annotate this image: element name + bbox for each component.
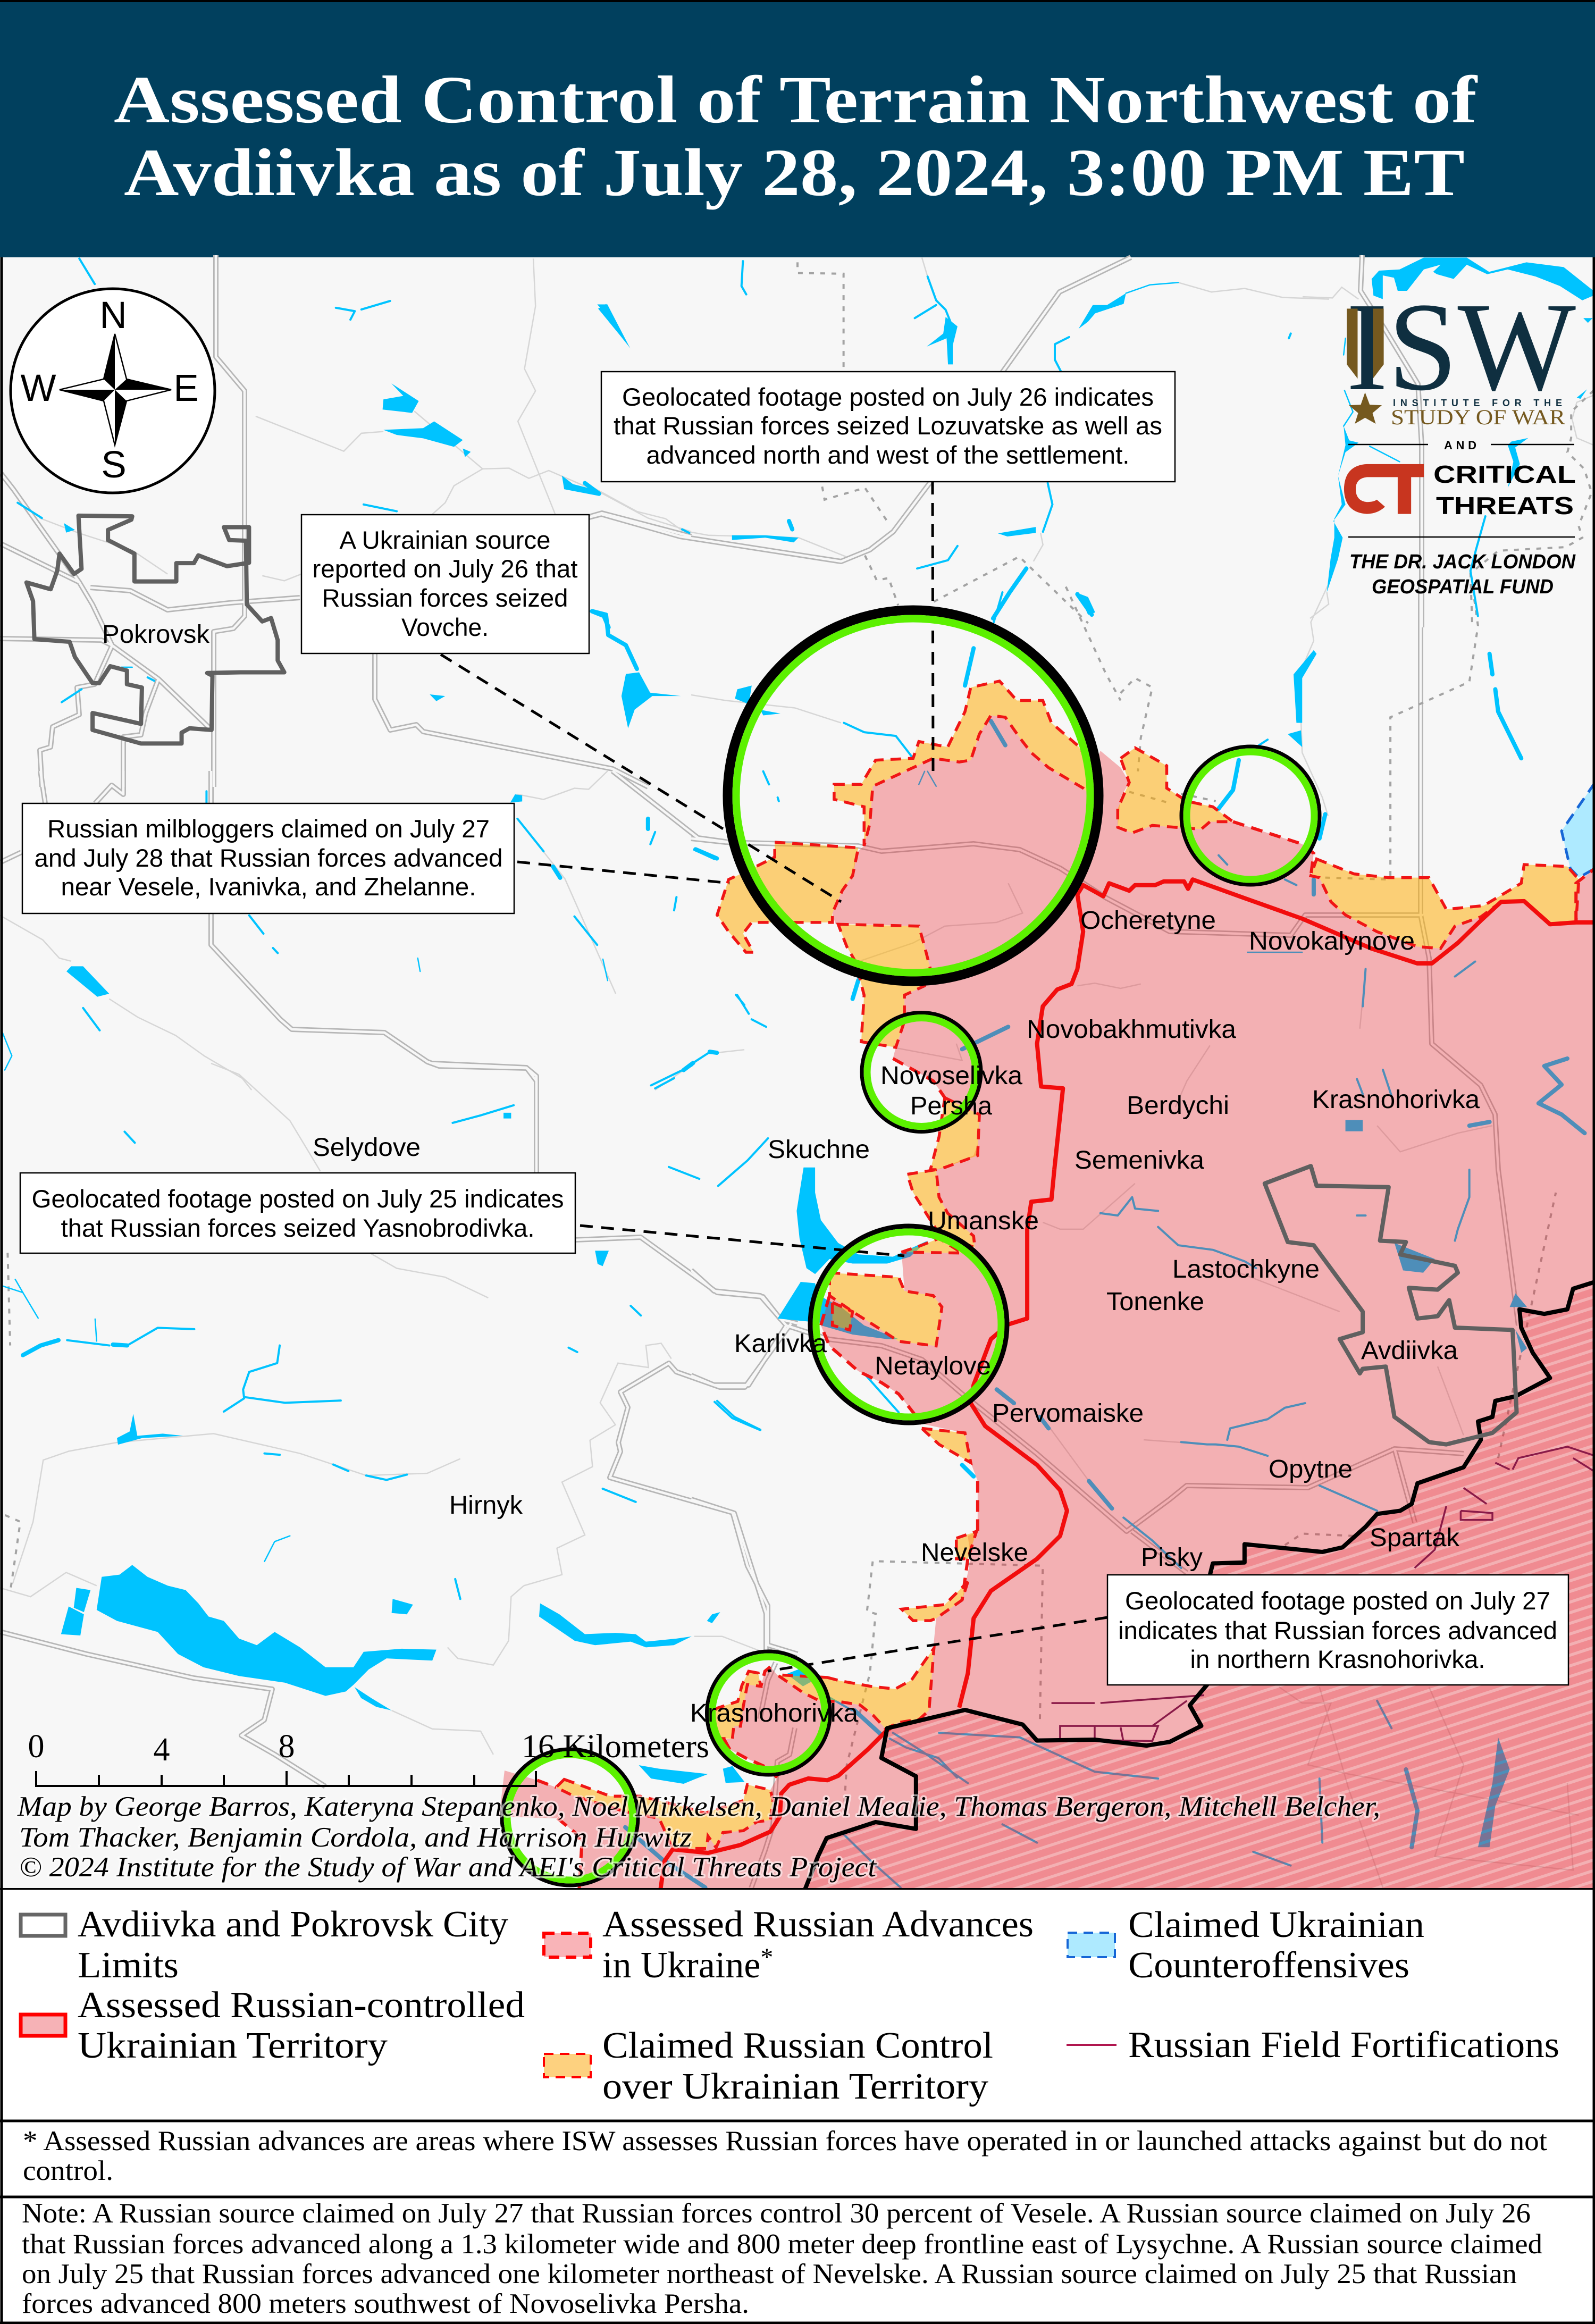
compass rose: W — [20, 367, 56, 409]
settlement labels: Hirnyk — [449, 1491, 523, 1520]
settlement labels: Pisky — [1141, 1543, 1203, 1572]
callout: Vovche: A Ukrainian source — [339, 526, 551, 554]
footnote panel — [0, 2121, 1595, 2197]
ISW wordmark: STUDY OF WAR — [1391, 405, 1565, 429]
legend: field fortifications: Russian Field Fortifications — [1128, 2025, 1559, 2066]
scale bar: 8 — [279, 1729, 295, 1765]
settlement labels: Spartak — [1370, 1524, 1460, 1552]
geospatial fund — [1349, 551, 1576, 598]
scale bar — [28, 1729, 709, 1786]
pre-invasion line of contact — [803, 1282, 1595, 1893]
note panel: that Russian forces advanced along a 1.3 kilometer wide and 800 meter deep frontline east of Lysychne. A Russian source claimed — [22, 2229, 1542, 2260]
callout: northern Krasnohorivka: indicates that Russian forces advanced — [1118, 1616, 1557, 1645]
settlement labels: Krasnohorivka — [690, 1699, 858, 1727]
settlement labels: Lastochkyne — [1172, 1255, 1320, 1283]
settlement labels: Nevelske — [921, 1539, 1028, 1567]
settlement labels: Umanske — [928, 1207, 1039, 1235]
circle: northern Krasnohorivka — [707, 1651, 830, 1775]
advance boundary dashes — [537, 821, 1595, 1889]
Avdiivka city limits — [1265, 1166, 1517, 1445]
geospatial fund: GEOSPATIAL FUND — [1372, 576, 1554, 598]
callout: Lozuvatske: advanced north and west of the settlement. — [647, 441, 1129, 469]
callout: Vesele, Ivanivka, Zhelanne: near Vesele, Ivanivka, and Zhelanne. — [61, 872, 476, 901]
geospatial fund: THE DR. JACK LONDON — [1349, 551, 1576, 573]
circle: Nevelske southwest — [502, 1749, 638, 1885]
settlement labels: Selydove — [313, 1134, 421, 1162]
legend panel — [0, 1888, 1595, 2121]
legend: city limits: Avdiivka and Pokrovsk City — [78, 1904, 508, 1945]
Pokrovsk city limits — [27, 516, 284, 743]
Critical Threats mark: THREATS — [1436, 492, 1574, 519]
callout: Yasnobrodivka: Geolocated footage posted on July 25 indicates — [32, 1185, 564, 1213]
circle: Yasnobrodivka — [810, 1226, 1007, 1423]
settlement labels: Avdiivka — [1361, 1337, 1458, 1365]
scale bar: 4 — [153, 1732, 170, 1768]
callout: Lozuvatske: that Russian forces seized Lozuvatske as well as — [614, 412, 1162, 440]
scale bar: 16 Kilometers — [522, 1729, 709, 1765]
map panel — [0, 255, 1595, 1893]
legend: Russian-controlled territory — [21, 1985, 525, 2066]
compass rose — [11, 289, 215, 493]
title: Avdiivka as of July 28, 2024, 3:00 PM ET — [124, 136, 1465, 210]
legend: claimed Ukrainian counteroffensives: Claimed Ukrainian — [1128, 1904, 1424, 1945]
claimed Russian control areas — [556, 681, 1579, 1849]
title: Assessed Control of Terrain Northwest of — [114, 63, 1478, 137]
callout: Vesele, Ivanivka, Zhelanne: and July 28 that Russian forces advanced — [34, 844, 503, 872]
legend: assessed Russian advances: in Ukraine — [602, 1945, 760, 1986]
ISW wordmark: ISW — [1346, 277, 1576, 417]
settlement labels: Semenivka — [1074, 1146, 1204, 1174]
settlement labels: Pervomaiske — [992, 1399, 1144, 1428]
circle: Novoselivka Persha — [862, 1012, 981, 1131]
settlement labels: Tonenke — [1106, 1288, 1204, 1316]
callout: Lozuvatske: Geolocated footage posted on July 26 indicates — [622, 383, 1154, 411]
rivers and reservoirs — [2, 257, 1593, 1887]
ISW and Critical Threats logos — [1344, 277, 1576, 598]
callout: Lozuvatske — [601, 372, 1175, 482]
settlement labels: Pokrovsk — [102, 620, 210, 649]
callout: northern Krasnohorivka: Geolocated footage posted on July 27 — [1125, 1587, 1550, 1615]
settlement labels: Karlivka — [734, 1330, 827, 1358]
footnote panel: * Assessed Russian advances are areas where ISW assesses Russian forces have operated in or launched attacks against but do not — [23, 2126, 1547, 2157]
scale bar: 0 — [28, 1729, 45, 1765]
callout: Vesele, Ivanivka, Zhelanne: Russian milbloggers claimed on July 27 — [47, 815, 490, 843]
legend: claimed Russian control: over Ukrainian Territory — [602, 2066, 988, 2107]
assessed control solid red line — [660, 879, 1595, 1889]
note panel — [0, 2197, 1595, 2323]
callout: Vovche: Vovche. — [401, 613, 489, 641]
callout: northern Krasnohorivka: in northern Krasnohorivka. — [1190, 1645, 1485, 1673]
circle: Lozuvatske and Vovche area — [727, 610, 1098, 981]
settlement labels: Persha — [910, 1092, 992, 1120]
settlement labels: Novobakhmutivka — [1027, 1016, 1236, 1044]
settlement labels: Novokalynove — [1249, 927, 1415, 955]
settlement labels — [102, 620, 1480, 1727]
legend: claimed Russian control: Claimed Russian Control — [602, 2025, 993, 2066]
map credits: © 2024 Institute for the Study of War and AEI's Critical Threats Project — [19, 1852, 877, 1883]
legend: claimed Ukrainian counteroffensives — [1068, 1904, 1424, 1986]
dotted administrative lines — [5, 262, 1593, 1810]
legend: assessed Russian advances: * — [760, 1943, 773, 1971]
Critical Threats mark: CRITICAL — [1433, 460, 1576, 488]
callout: Vovche: Russian forces seized — [322, 584, 568, 612]
callout: Yasnobrodivka: that Russian forces seized Yasnobrodivka. — [61, 1214, 535, 1242]
legend: city limits — [21, 1904, 508, 1986]
callout: Vovche: reported on July 26 that — [313, 555, 577, 583]
assessed Russian-controlled territory — [499, 716, 1595, 1889]
legend: city limits: Limits — [78, 1945, 179, 1986]
callout: Yasnobrodivka — [20, 1173, 575, 1253]
callout: Vesele, Ivanivka, Zhelanne — [22, 803, 514, 913]
callout leader lines — [441, 482, 1107, 1671]
settlement labels: Netaylove — [875, 1352, 991, 1380]
note panel: on July 25 that Russian forces advanced one kilometer northeast of Nevelske. A Russian source claimed on July 25 that Russian — [22, 2259, 1517, 2289]
settlement labels: Skuchne — [768, 1136, 870, 1164]
map credits: Tom Thacker, Benjamin Cordola, and Harrison Hurwitz — [19, 1822, 692, 1853]
settlement labels: Berdychi — [1127, 1092, 1229, 1120]
compass rose: S — [101, 444, 127, 486]
compass rose: N — [99, 295, 127, 337]
footnote panel: control. — [23, 2155, 113, 2186]
divider and AND: AND — [1444, 439, 1476, 452]
roads — [0, 255, 1518, 1888]
thin boundary lines — [0, 257, 1593, 1887]
callout: northern Krasnohorivka — [1107, 1575, 1568, 1685]
claimed Ukrainian counteroffensive area — [1562, 783, 1595, 878]
map credits: Map by George Barros, Kateryna Stepanenko, Noel Mikkelsen, Daniel Mealie, Thomas Bergeron, Mitchell Belcher, — [17, 1791, 1380, 1822]
highlight circles — [502, 610, 1320, 1885]
legend: assessed Russian advances — [544, 1904, 1034, 1986]
ISW wordmark: INSTITUTE FOR THE — [1393, 398, 1562, 408]
settlement labels: Opytne — [1269, 1455, 1353, 1483]
settlement labels: Ocheretyne — [1080, 907, 1216, 935]
compass rose: E — [173, 367, 199, 409]
legend: Russian-controlled territory: Ukrainian Territory — [78, 2025, 388, 2066]
legend: claimed Russian control — [544, 2025, 993, 2107]
Russian field fortifications — [1052, 1447, 1595, 1742]
Critical Threats mark — [1344, 460, 1576, 519]
legend: assessed Russian advances: Assessed Russian Advances — [602, 1904, 1034, 1945]
Russian-occupied hatched area — [808, 1285, 1593, 1888]
settlement labels: Novoselivka — [880, 1062, 1022, 1090]
header banner — [0, 0, 1595, 257]
title — [114, 63, 1478, 210]
note panel: forces advanced 800 meters southwest of Novoselivka Persha. — [22, 2288, 749, 2319]
legend: Russian-controlled territory: Assessed Russian-controlled — [78, 1985, 525, 2026]
legend: claimed Ukrainian counteroffensives: Counteroffensives — [1128, 1945, 1409, 1986]
panel frame and dividers — [0, 1888, 1595, 2324]
map credits — [17, 1791, 1380, 1883]
settlement labels: Krasnohorivka — [1312, 1086, 1480, 1114]
callout: Vovche — [301, 515, 589, 653]
circle: east of Lysychne — [1181, 746, 1320, 885]
note panel: Note: A Russian source claimed on July 27 that Russian forces control 30 percent of Vesele. A Russian source claimed on July 26 — [22, 2198, 1531, 2229]
